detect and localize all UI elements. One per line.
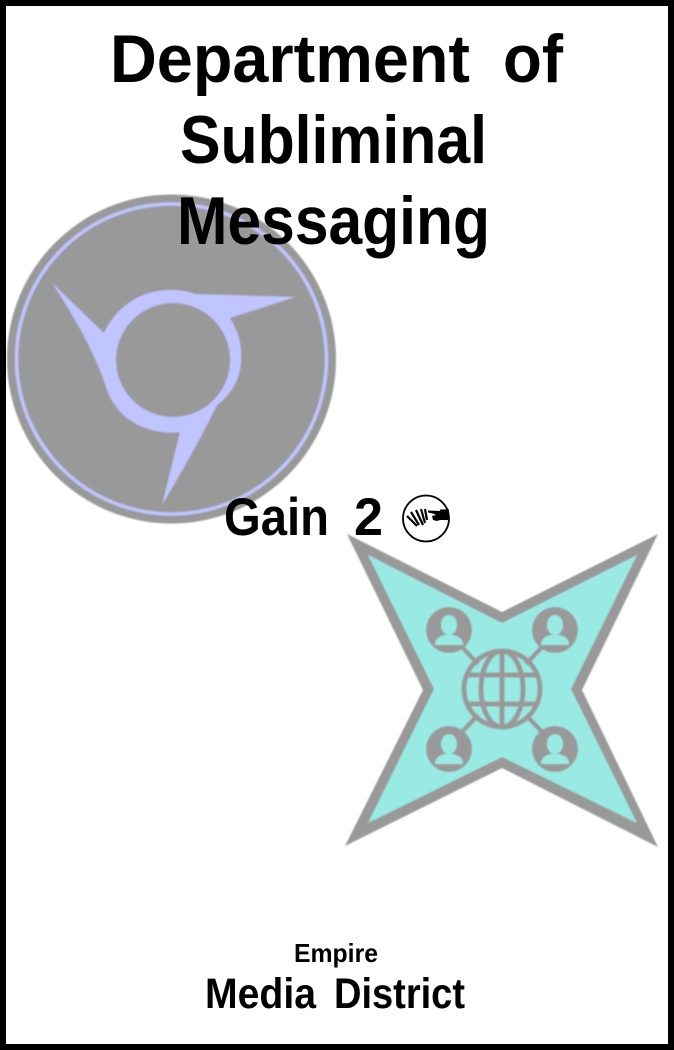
gain value: 2	[354, 488, 383, 547]
connector lines	[460, 645, 544, 734]
globe	[464, 651, 540, 727]
person: bottom right	[532, 726, 578, 772]
district name: Media	[205, 970, 317, 1018]
title: of	[503, 21, 563, 97]
person: top right	[532, 607, 578, 653]
gain value: Gain	[224, 488, 329, 547]
icon: round swirl emblem	[7, 194, 336, 524]
title: Department	[110, 21, 470, 97]
title: Messaging	[177, 183, 490, 259]
title	[110, 21, 563, 259]
affiliation label: Empire	[294, 938, 378, 968]
icon: pointing hand in circle	[403, 496, 449, 542]
district name	[205, 970, 465, 1018]
person: bottom left	[426, 726, 472, 772]
title: Subliminal	[180, 102, 487, 178]
district name: District	[334, 970, 465, 1018]
icon: four-point star with connected globe	[345, 534, 658, 847]
person: top left	[426, 607, 472, 653]
